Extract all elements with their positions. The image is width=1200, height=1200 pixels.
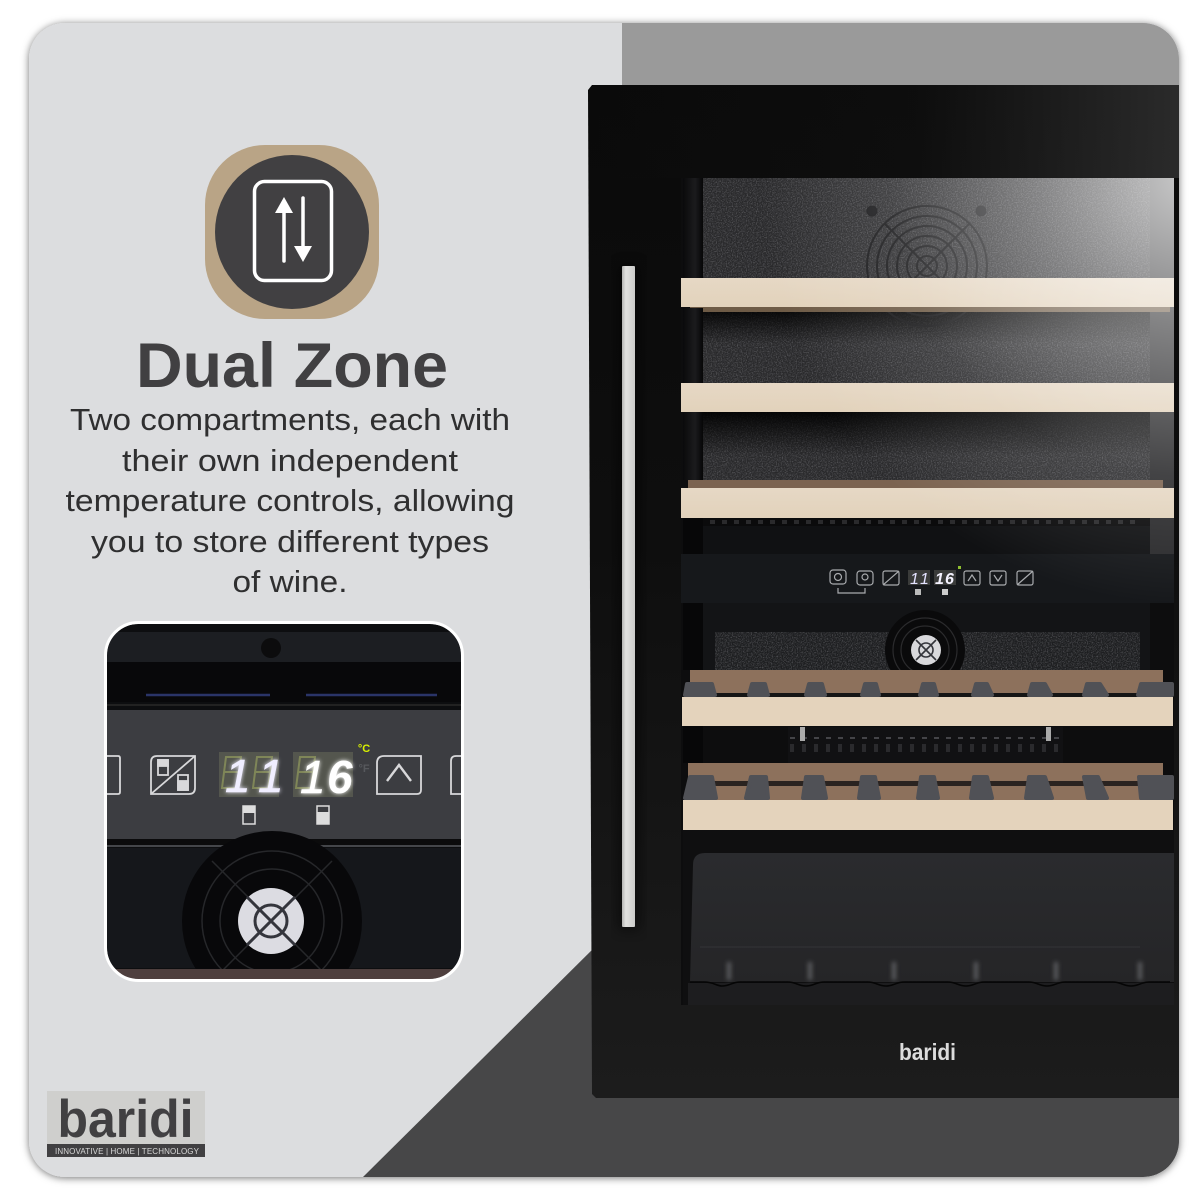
description text: you to store different types [91, 524, 489, 559]
digit display left: 11 [225, 750, 284, 802]
lower shelf 4 [682, 670, 1173, 726]
digit display right: 1 [300, 751, 326, 803]
brand logo: INNOVATIVE | HOME | TECHNOLOGY [55, 1147, 200, 1156]
upper back wall [703, 178, 1150, 480]
right partial button [451, 756, 461, 794]
panel temperature display [908, 566, 961, 595]
description text: Two compartments, each with [70, 402, 510, 437]
panel temperature display: 11 [910, 571, 929, 588]
upper shelf 1 [681, 278, 1174, 312]
rack grille [790, 727, 1059, 752]
down button [990, 571, 1006, 585]
control panel [681, 554, 1174, 603]
left partial button [107, 756, 120, 794]
door handle [622, 266, 636, 927]
up arrow button [377, 756, 421, 794]
upper shelf 3 [681, 480, 1174, 518]
dark side rails [690, 178, 703, 480]
glass reflection [802, 178, 1174, 566]
upper housing [107, 632, 461, 706]
lower shelf 5 [683, 763, 1173, 830]
upper shelf 2 [681, 383, 1174, 412]
wine cooler product [588, 85, 1179, 1098]
digit display right: 6 [327, 751, 353, 803]
description text: of wine. [232, 564, 348, 599]
description text: temperature controls, allowing [66, 483, 514, 518]
up button [964, 571, 980, 585]
celsius indicator: °C [358, 743, 370, 755]
zone marker right [317, 806, 329, 824]
upper fan [867, 206, 987, 326]
icon: dual zone arrows [205, 145, 379, 319]
lower fan [885, 610, 965, 670]
lower back wall [703, 603, 1150, 673]
power button [830, 570, 846, 584]
panel temperature display: 16 [935, 571, 954, 588]
fahrenheit indicator: °F [358, 763, 370, 775]
bottom compartment [688, 853, 1174, 1005]
unit button [1017, 571, 1033, 585]
door logo: baridi [899, 1039, 956, 1065]
description text: their own independent [122, 443, 458, 478]
cabinet interior [681, 178, 1174, 1005]
brand logo: baridi [58, 1090, 194, 1149]
closeup fan [107, 831, 461, 1011]
light button [857, 571, 873, 585]
zone button [883, 571, 899, 585]
zone switch button [151, 756, 195, 794]
zone marker left [243, 806, 255, 824]
heading: Dual Zone [136, 331, 448, 401]
digit display right [293, 751, 353, 803]
description text [66, 402, 514, 599]
inset photo: control panel closeup [106, 622, 462, 1011]
panel strip [107, 710, 461, 839]
door frame [588, 85, 1179, 1098]
